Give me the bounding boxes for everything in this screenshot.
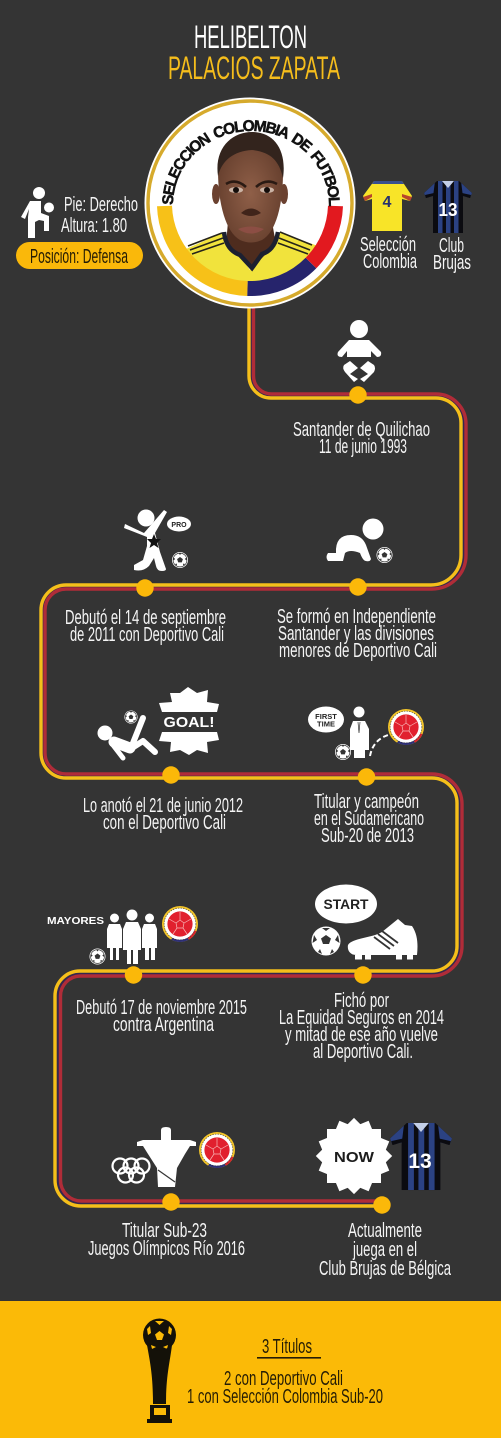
text: titles list (187, 1368, 383, 1408)
player facts: Altura: 1.80 (61, 215, 127, 237)
title: HELIBELTON (194, 19, 307, 55)
icon: start boot and ball: START (324, 897, 369, 912)
icon: first time under-20: FIRST (315, 712, 337, 721)
timeline dots (125, 386, 391, 1214)
text: La Equidad transfer (279, 990, 444, 1063)
text: professional debut: de 2011 con Deportivo Cali (70, 624, 224, 646)
text: under-20 champion: Sub-20 de 2013 (321, 825, 414, 847)
text: first goal: Lo anotó el 21 de junio 2012 (83, 795, 243, 817)
text: La Equidad transfer: al Deportivo Cali. (313, 1041, 413, 1063)
text: under-20 champion (314, 791, 424, 847)
icon: debut player: PRO (171, 522, 187, 529)
icon: Colombia jersey: 4 (383, 194, 392, 211)
text: current club: Actualmente (348, 1220, 422, 1242)
icon: Rio olympics (112, 1127, 235, 1187)
text: professional debut: Debutó el 14 de septiembre (65, 607, 226, 629)
label: Selección Colombia: Selección (360, 234, 416, 256)
text: birth (293, 419, 430, 458)
icon: Club Brujas jersey: 13 (438, 200, 458, 220)
text: youth teams (277, 606, 437, 662)
label: Club Brujas: Brujas (433, 252, 471, 274)
text: current club: juega en el (352, 1239, 417, 1261)
badge tricolour ring (164, 206, 336, 289)
icon: now burst and Brujas jersey: 13 (408, 1150, 432, 1173)
portrait (186, 132, 316, 282)
text: La Equidad transfer: Fichó por (334, 990, 389, 1012)
text: under-20 champion: Titular y campeón (314, 791, 419, 813)
icon: Colombia jersey (363, 181, 412, 231)
title (168, 19, 340, 86)
text: titles list: 2 con Deportivo Cali (224, 1368, 343, 1390)
title: PALACIOS ZAPATA (168, 50, 340, 86)
label: Selección Colombia (360, 234, 418, 273)
text: birth: 11 de junio 1993 (319, 436, 407, 458)
icon: senior team (47, 906, 198, 964)
player facts (61, 194, 138, 237)
position pill (16, 242, 143, 269)
icon: trophy (143, 1318, 176, 1423)
icon: now burst and Brujas jersey (316, 1118, 452, 1194)
text: titles heading: 3 Títulos (262, 1336, 312, 1358)
icon: goal burst: GOAL! (164, 714, 214, 731)
label: Club Brujas (433, 235, 471, 274)
icon: start boot and ball (312, 884, 417, 960)
text: birth: Santander de Quilichao (293, 419, 430, 441)
text: professional debut (65, 607, 226, 646)
panel: titles footer (0, 1301, 501, 1438)
label: Club Brujas: Club (439, 235, 464, 257)
icon: goal burst (159, 687, 219, 755)
player badge (144, 98, 356, 308)
text: current club (319, 1220, 452, 1280)
icon: crawling baby (326, 518, 392, 563)
icon: debut player (124, 510, 191, 571)
icon: first time under-20: TIME (317, 720, 335, 728)
icon: now burst and Brujas jersey: NOW (334, 1149, 375, 1166)
icon: overhead kick player (98, 710, 155, 758)
text: first goal: con el Deportivo Cali (103, 812, 226, 834)
badge curved text: SELECCION COLOMBIA DE FUTBOL (162, 120, 340, 206)
icon: Club Brujas jersey (424, 181, 472, 233)
text: titles list: 1 con Selección Colombia Sub-20 (187, 1386, 383, 1408)
player facts: Pie: Derecho (64, 194, 138, 216)
timeline path (41, 305, 466, 1206)
text: senior debut: contra Argentina (113, 1014, 215, 1036)
label: Selección Colombia: Colombia (363, 251, 418, 273)
text: under-20 champion: en el Sudamericano (314, 808, 424, 830)
position pill: Posición: Defensa (30, 246, 129, 268)
text: Rio 2016 (88, 1220, 245, 1260)
icon: first time under-20 (308, 706, 424, 760)
text: senior debut (76, 997, 247, 1036)
text: Rio 2016: Titular Sub-23 (122, 1220, 207, 1242)
icon: baby (338, 320, 381, 382)
text: senior debut: Debutó 17 de noviembre 2015 (76, 997, 247, 1019)
icon: player kicking ball (21, 187, 54, 238)
icon: senior team: MAYORES (47, 916, 104, 927)
text: Rio 2016: Juegos Olímpicos Río 2016 (88, 1238, 245, 1260)
text: first goal (83, 795, 243, 834)
